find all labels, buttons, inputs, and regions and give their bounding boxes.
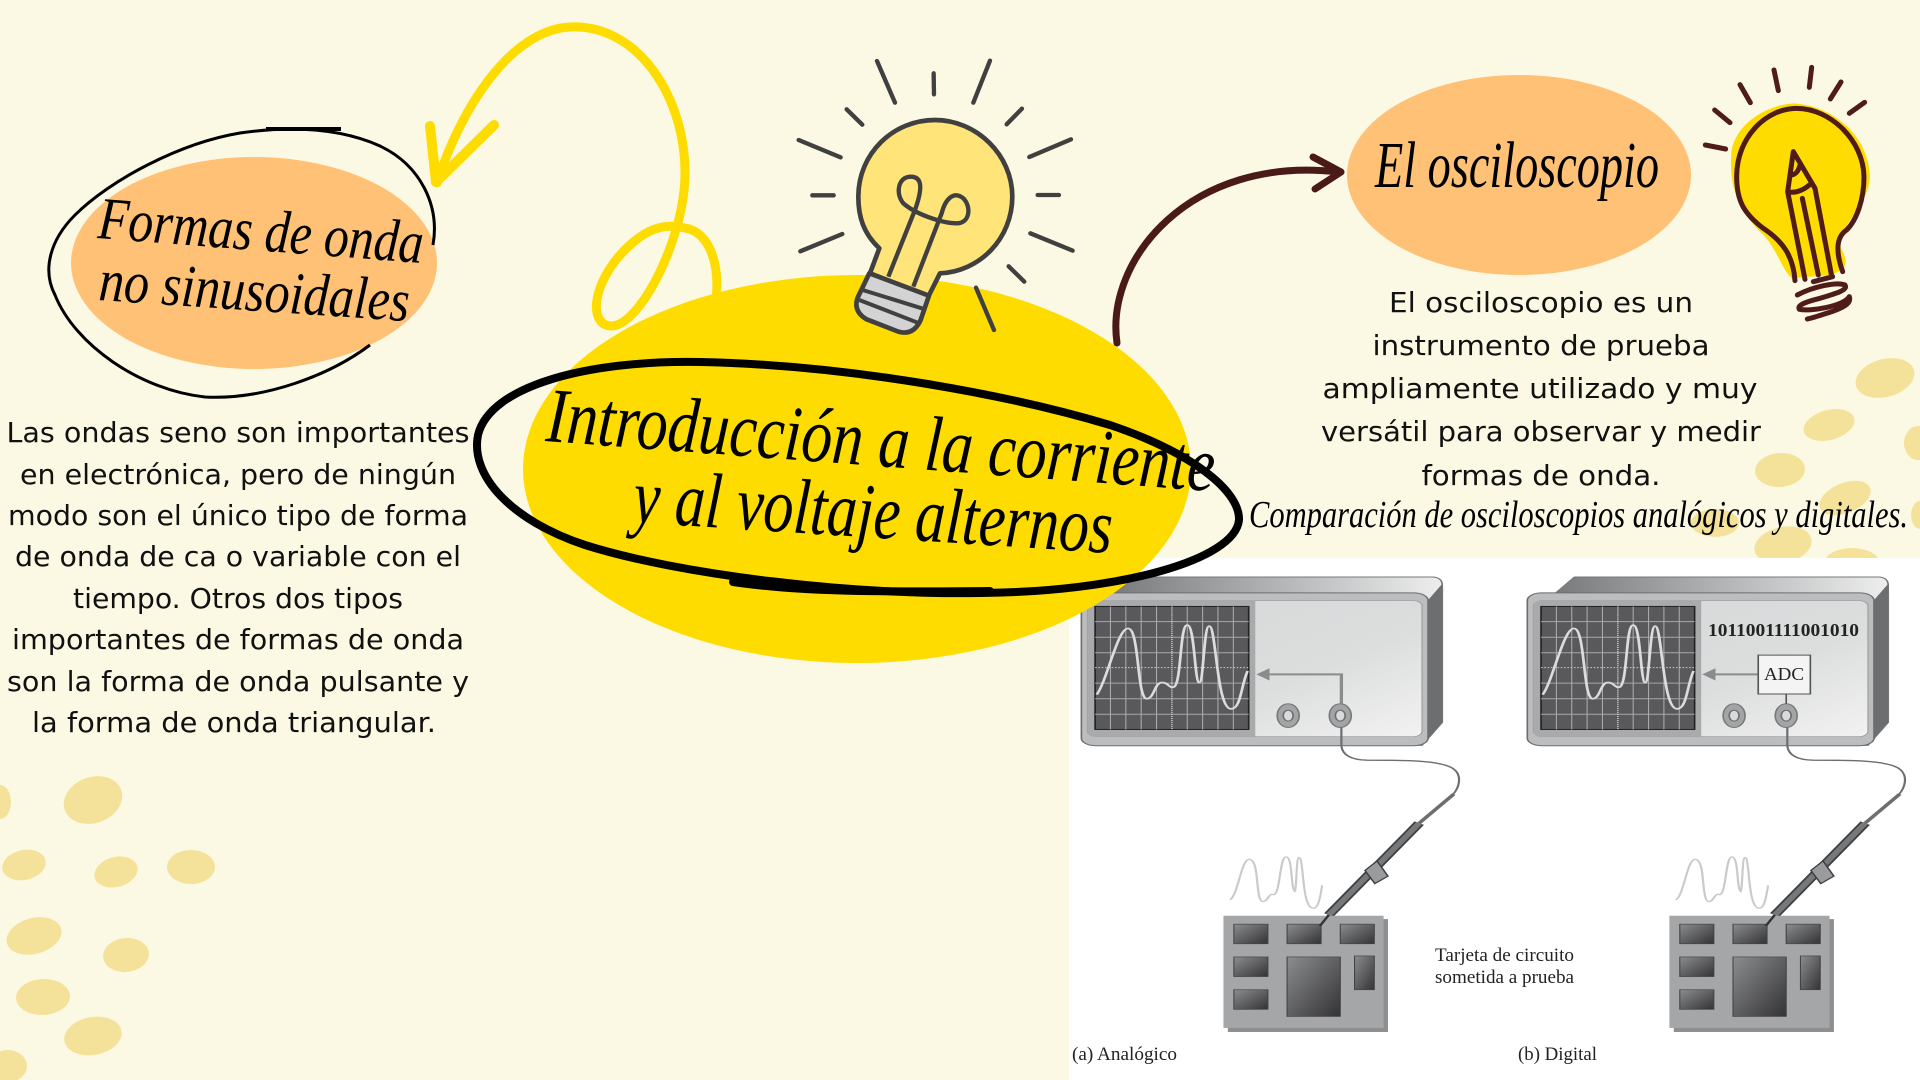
yellow curved arrow: [430, 27, 717, 326]
oscilloscope: analog: [1081, 577, 1459, 1032]
left text block: [6, 416, 469, 739]
right text block: [1321, 286, 1762, 492]
left text block: modo son el único tipo de forma: [8, 499, 468, 532]
right text block: El osciloscopio es un: [1389, 286, 1693, 319]
left text block: tiempo. Otros dos tipos: [73, 582, 403, 615]
left text block: son la forma de onda pulsante y: [7, 665, 469, 698]
left text block: en electrónica, pero de ningún: [20, 458, 456, 491]
right text block: ampliamente utilizado y muy: [1322, 372, 1758, 405]
title: y al voltaje alternos: [626, 452, 1116, 570]
image: oscilloscope comparison diagram: ADC: [1764, 664, 1804, 684]
oscilloscope: digital: [1527, 577, 1905, 1032]
image: oscilloscope comparison diagram: sometida a prueba: [1435, 968, 1574, 988]
right text block: instrumento de prueba: [1372, 329, 1710, 362]
right text block: versátil para observar y medir: [1321, 415, 1762, 448]
image: oscilloscope comparison diagram: (a) Analógico: [1072, 1044, 1177, 1065]
decorative blobs: right: [1691, 352, 1920, 576]
right text block: formas de onda.: [1422, 459, 1660, 492]
left text block: importantes de formas de onda: [12, 623, 464, 656]
left heading: [95, 185, 426, 334]
decorative blobs: bottom left: [0, 768, 215, 1080]
diagram labels: 1011001111001010: [1708, 620, 1859, 640]
right heading blob: [1347, 75, 1691, 275]
left heading: no sinusoidales: [97, 247, 412, 334]
image: oscilloscope comparison diagram: Tarjeta de circuito: [1435, 946, 1574, 966]
hand-drawn ring around left heading: [49, 129, 434, 397]
left heading blob: [71, 157, 437, 369]
dark curved arrow: [1116, 157, 1341, 343]
title: [543, 371, 1218, 570]
title: Introducción a la corriente: [543, 371, 1218, 508]
right heading: El osciloscopio: [1374, 129, 1659, 202]
hand-drawn ring around title: [477, 362, 1239, 593]
icon: pencil bulb: [1705, 67, 1870, 319]
left heading: Formas de onda: [95, 185, 426, 276]
central yellow ellipse: [523, 275, 1191, 663]
left text block: Las ondas seno son importantes: [6, 416, 469, 449]
image: oscilloscope comparison diagram: [1069, 558, 1920, 1080]
left text block: de onda de ca o variable con el: [15, 540, 461, 573]
icon: light bulb: [799, 61, 1073, 333]
left text block: la forma de onda triangular.: [32, 706, 436, 739]
image: oscilloscope comparison diagram: (b) Digital: [1518, 1044, 1597, 1065]
